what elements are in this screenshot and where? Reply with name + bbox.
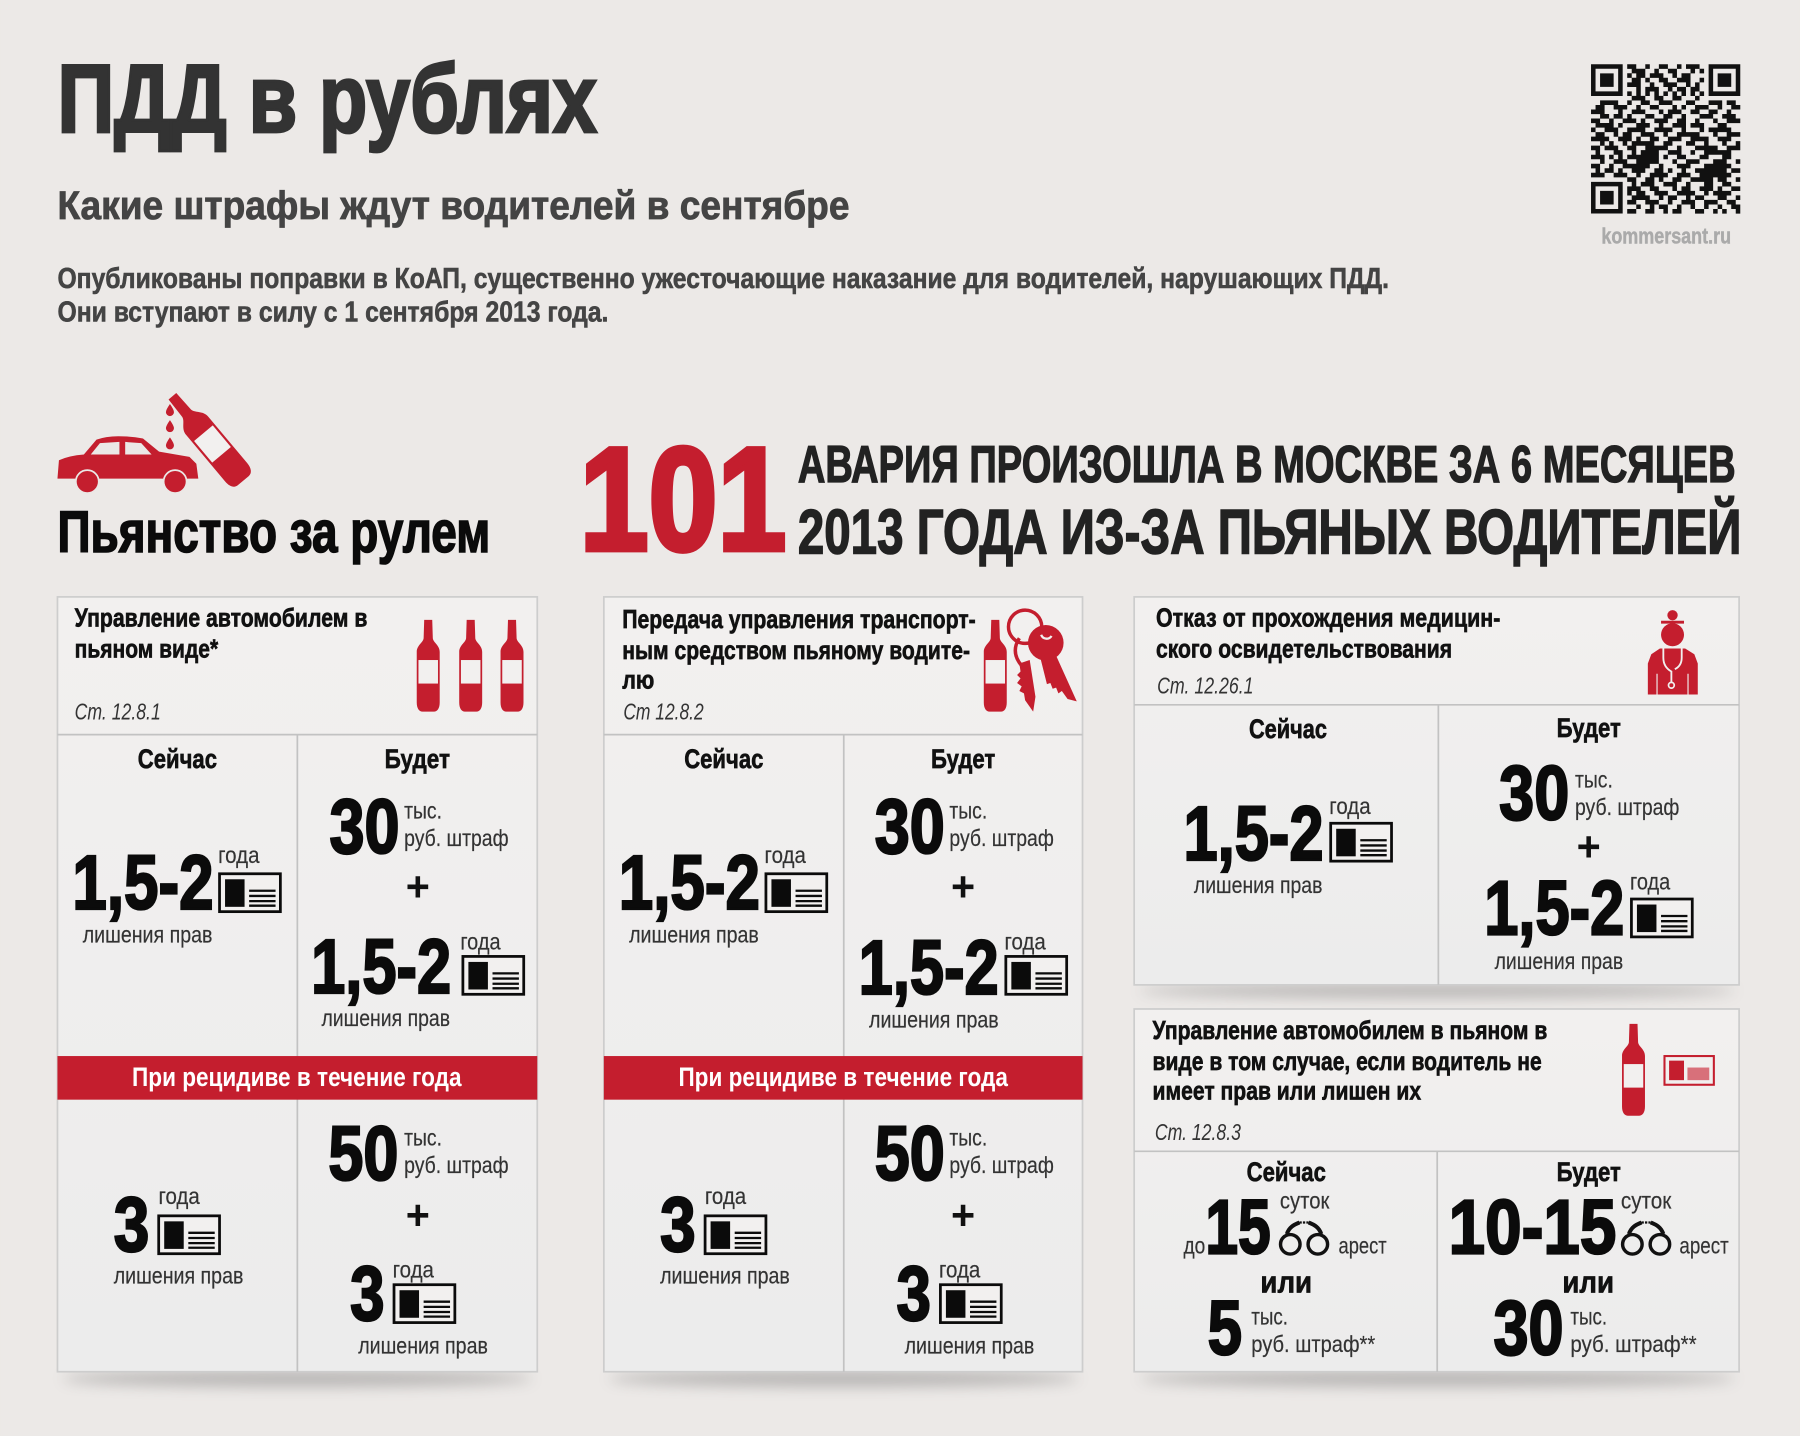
heading text: Управление автомобилем в пьяном в [1153,1017,1547,1045]
red bar: repeat offence [604,1056,1083,1100]
future: arrest or fine: руб. штраф** [1570,1331,1697,1357]
future: fine plus suspension: 30 [875,784,945,870]
title: ПДД в рублях [57,46,597,153]
article reference: Ст. 12.8.1 [75,699,161,725]
column heading now: Сейчас [1249,714,1327,744]
red bar: repeat offence: При рецидиве в течение года [132,1062,462,1092]
future: arrest or fine: 10-15 [1449,1184,1616,1270]
repeat now: 3 [660,1182,696,1268]
now: licence suspension: 1,5-2 [72,840,214,926]
future: fine plus suspension: 1,5-2 [859,925,999,1011]
intro text [57,263,1389,328]
column heading future: Будет [385,744,450,774]
heading text [1153,1017,1547,1106]
future: fine plus suspension [1484,751,1692,974]
repeat future: 3 [350,1251,385,1337]
future: fine plus suspension: лишения прав [869,1006,999,1032]
icon: bottle and licence [1622,1024,1714,1116]
now: arrest or fine: тыс. [1251,1304,1288,1330]
column heading now: Сейчас [138,744,217,774]
repeat future: 50 [328,1111,398,1197]
repeat future [328,1111,509,1358]
article reference: Ст 12.8.2 [623,699,704,725]
repeat future: + [406,1192,430,1238]
now: licence suspension: лишения прав [1194,872,1322,898]
repeat now: лишения прав [660,1262,790,1288]
article reference: Ст. 12.26.1 [1157,672,1254,698]
future: fine plus suspension: 1,5-2 [1484,865,1624,951]
repeat now: года [705,1183,746,1209]
now: arrest or fine [1184,1184,1387,1372]
big number 101: 101 [580,418,786,582]
future: fine plus suspension: тыс. [404,797,442,823]
future: fine plus suspension: + [1577,824,1601,870]
now: licence suspension [619,840,827,947]
heading text: пьяном виде* [75,636,219,664]
future: fine plus suspension [859,784,1067,1032]
future: fine plus suspension: руб. штраф [949,825,1054,851]
panel: driving drunk without a licence [1134,1009,1739,1372]
future: fine plus suspension: 30 [330,784,400,870]
future: fine plus suspension: 1,5-2 [311,924,451,1010]
article reference: Ст. 12.8.3 [1155,1119,1241,1145]
now: arrest or fine: руб. штраф** [1251,1331,1375,1357]
column heading future: Будет [1557,1157,1621,1187]
now: licence suspension: 1,5-2 [619,840,760,926]
QR code [1591,67,1740,211]
future: fine plus suspension: руб. штраф [404,825,509,851]
heading text: Управление автомобилем в [75,605,367,633]
repeat now: 3 [114,1182,149,1268]
heading text: Передача управления транспорт- [622,606,976,634]
heading text: виде в том случае, если водитель не [1153,1048,1542,1076]
icon: bottle and keys [984,610,1077,712]
heading text: Отказ от прохождения медицин- [1156,605,1500,633]
heading text: ского освидетельствования [1156,636,1452,664]
intro text: Они вступают в силу с 1 сентября 2013 года. [57,296,608,328]
future: fine plus suspension: тыс. [1575,766,1613,792]
heading text [75,605,367,664]
icon: doctor [1648,610,1698,694]
future: fine plus suspension: руб. штраф [1575,794,1679,820]
column heading now: Сейчас [1247,1157,1326,1187]
now: licence suspension: года [765,842,806,868]
now: arrest or fine: до [1184,1232,1205,1258]
now: licence suspension: лишения прав [629,921,759,947]
future: arrest or fine: или [1562,1265,1614,1300]
future: fine plus suspension: + [406,864,430,910]
future: fine plus suspension: лишения прав [321,1005,450,1031]
icon: drunk car and bottle [57,387,254,493]
future: fine plus suspension: года [1630,869,1670,895]
column heading future: Будет [931,744,995,774]
future: arrest or fine: тыс. [1570,1304,1607,1330]
source label: kommersant.ru [1601,223,1731,248]
now: arrest or fine: суток [1280,1188,1330,1214]
heading text: лю [622,667,654,695]
repeat future: руб. штраф [404,1152,509,1178]
repeat future: 3 [897,1251,931,1337]
future: arrest or fine: суток [1621,1188,1672,1214]
panel: drunk driving [57,597,537,1372]
heading text [622,606,976,695]
repeat future: 50 [875,1111,945,1197]
future: fine plus suspension: 30 [1499,751,1569,837]
panel: handing over control [604,597,1083,1372]
now: licence suspension [72,840,280,947]
future: fine plus suspension [311,784,524,1031]
repeat now: года [158,1183,200,1209]
future: arrest or fine [1449,1184,1729,1372]
repeat future: тыс. [404,1125,442,1151]
repeat future: лишения прав [905,1332,1034,1358]
now: licence suspension [1184,791,1392,898]
icon: three bottles [417,620,523,712]
red bar: repeat offence: При рецидиве в течение года [678,1062,1009,1092]
repeat now [660,1182,790,1288]
future: fine plus suspension: + [951,864,975,910]
now: licence suspension: лишения прав [83,921,212,947]
now: arrest or fine: или [1260,1265,1312,1300]
future: fine plus suspension: тыс. [949,797,987,823]
intro text: Опубликованы поправки в КоАП, существенно ужесточающие наказание для водителей, нарушающих ПДД. [57,263,1389,295]
now: arrest or fine: 15 [1205,1184,1271,1270]
section heading: Пьянство за рулем [57,500,490,565]
repeat future: тыс. [949,1125,987,1151]
repeat future: руб. штраф [949,1152,1054,1178]
subtitle: Какие штрафы ждут водителей в сентябре [57,183,849,228]
red bar: repeat offence [57,1056,537,1100]
column heading future: Будет [1557,713,1621,743]
now: licence suspension: года [1329,793,1371,819]
repeat future: + [951,1192,975,1238]
panel: refusing medical examination [1134,597,1739,985]
repeat future: года [939,1257,981,1283]
panel shadows [62,984,1736,1387]
now: arrest or fine: 5 [1208,1286,1242,1372]
future: arrest or fine: арест [1679,1232,1729,1258]
heading text: ным средством пьяному водите- [622,637,970,665]
heading text [1156,605,1500,664]
repeat future [875,1111,1054,1358]
now: arrest or fine: арест [1338,1232,1387,1258]
headline statistic [798,435,1741,567]
repeat now [114,1182,243,1288]
repeat future: года [393,1257,434,1283]
future: fine plus suspension: года [1004,928,1046,954]
now: licence suspension: 1,5-2 [1184,791,1324,877]
future: arrest or fine: 30 [1493,1286,1563,1372]
future: fine plus suspension: года [460,928,501,954]
repeat now: лишения прав [114,1262,243,1288]
future: fine plus suspension: лишения прав [1495,948,1623,974]
column heading now: Сейчас [684,744,763,774]
now: licence suspension: года [218,842,260,868]
heading text: имеет прав или лишен их [1153,1078,1422,1106]
repeat future: лишения прав [358,1332,488,1358]
